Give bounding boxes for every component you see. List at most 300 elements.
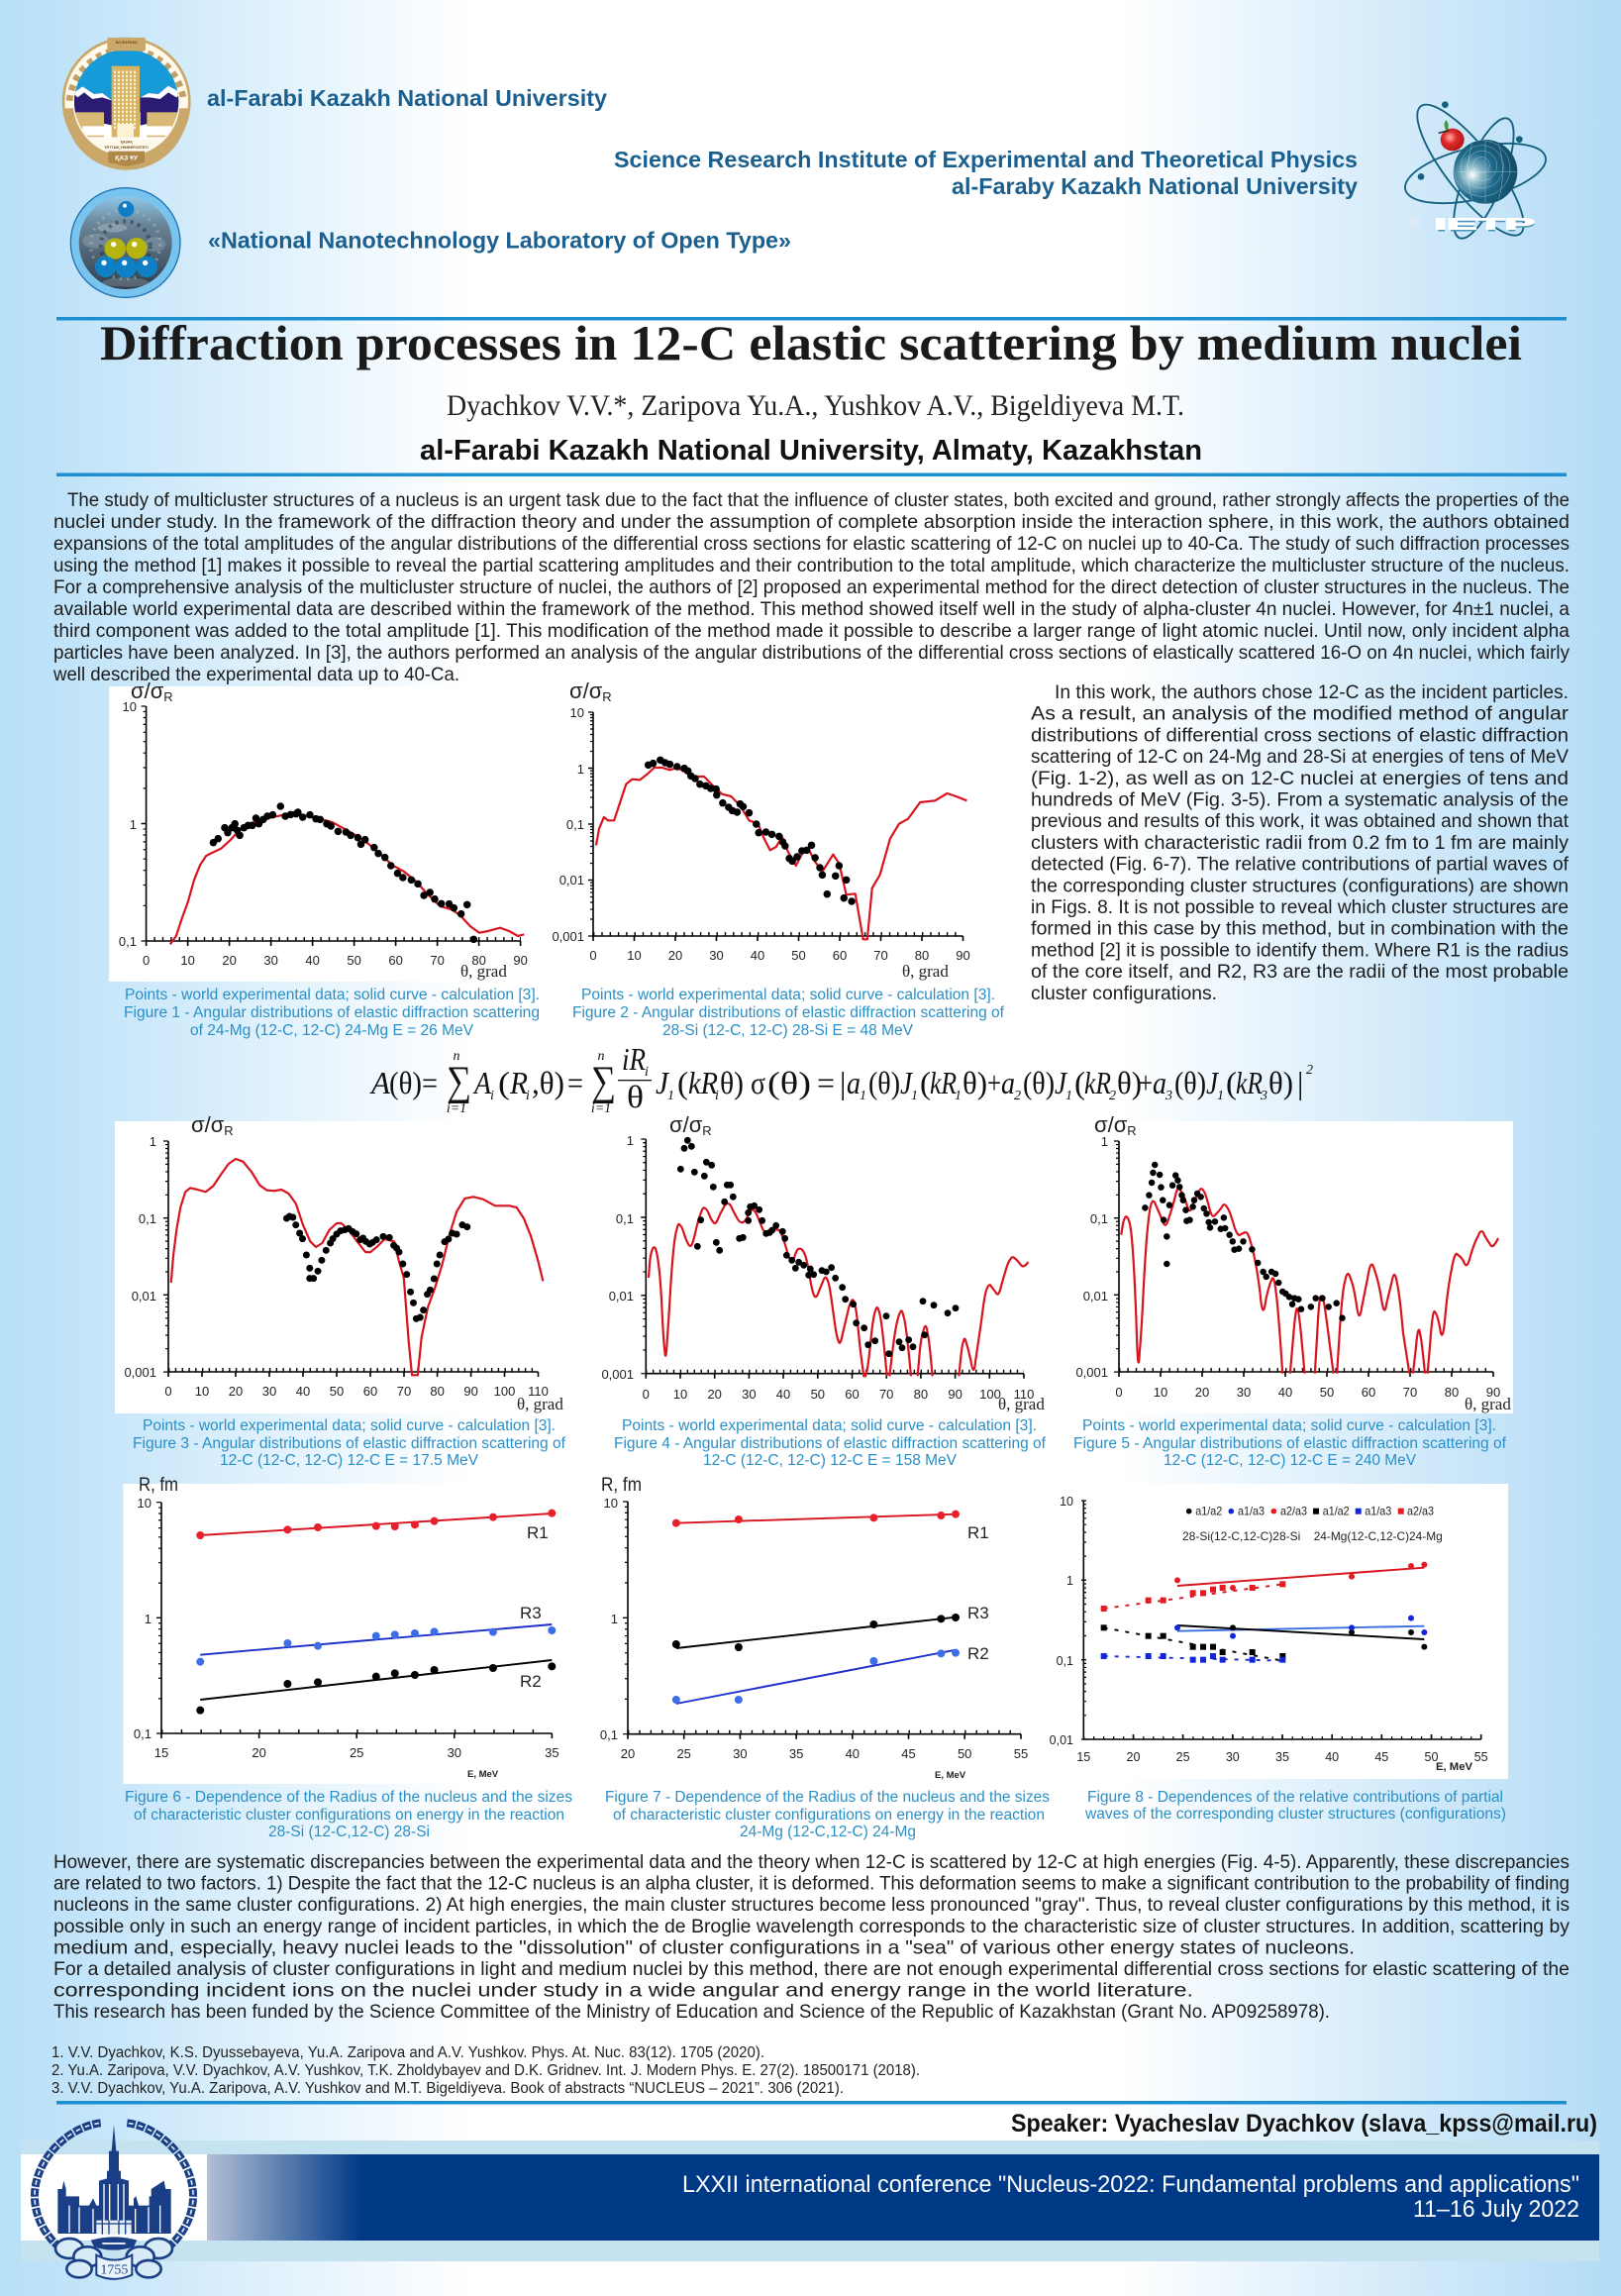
- references: 2. Yu.A. Zaripova, V.V. Dyachkov, A.V. Yushkov, T.K. Zholdybayev and D.K. Gridnev. Int. J. Modern Phys. E. 27(2). 18500171 (2018).: [51, 2062, 920, 2079]
- series: R3: [676, 1618, 956, 1648]
- axes: 40: [1278, 1385, 1292, 1400]
- axes: 35: [545, 1745, 559, 1760]
- series labels: R1: [527, 1523, 549, 1542]
- axes: 60: [833, 948, 847, 963]
- references: [51, 2044, 920, 2097]
- axes: [1050, 1495, 1488, 1764]
- text block: right column: method [2] it is possible to identify them. Where R1 is the radius: [1031, 939, 1569, 961]
- axes: 50: [330, 1384, 344, 1399]
- x axis label: θ, grad: [902, 962, 949, 981]
- text block: introduction: expansions of the total amplitudes of the angular distributions of the differential cross sections for elastic scattering of 12-C on nuclei up to 40-Ca. The study of such diffraction processes: [53, 533, 1570, 555]
- icon: al-Farabi Kazakh National University emblem: ҚАЗ ҰУ: [115, 155, 139, 161]
- caption: Figure 8 - Dependences of the relative contributions of partial: [1087, 1789, 1503, 1806]
- formula: 3: [1260, 1089, 1267, 1103]
- axes: 80: [915, 948, 929, 963]
- y axis label: R: [163, 689, 173, 704]
- text block: right column: hundreds of MeV (Fig. 3-5). From a systematic analysis of the: [1031, 788, 1569, 810]
- y axis label: σ/σ: [131, 678, 163, 703]
- caption: Points - world experimental data; solid curve - calculation [3].: [622, 1417, 1037, 1434]
- caption: Points - world experimental data; solid curve - calculation [3].: [1082, 1417, 1496, 1434]
- formula: iR: [622, 1041, 646, 1077]
- axes: [552, 705, 970, 963]
- series labels: [520, 1523, 549, 1691]
- panel: figure 2: [552, 678, 1005, 1039]
- text block: discussion: are related to two factors. 1) Despite the fact that the 12-C nucleus is an alpha cluster, it is deformed. This deformation seems to make a significant contribution to the probability of finding: [53, 1873, 1570, 1895]
- axes: 60: [363, 1384, 377, 1399]
- icon: al-Farabi Kazakh National University emblem: ӘЛ-ФАРАБИ: [116, 41, 138, 45]
- series labels: R1: [967, 1523, 989, 1542]
- text block: discussion: corresponding incident ions on the nuclei under study in a wide angular and energy range in the world literature.: [53, 1980, 1193, 2002]
- axes: 1: [627, 1133, 634, 1148]
- axes: 0,001: [1075, 1365, 1108, 1380]
- text block: right column: clusters with characteristic radii from 0.2 fm to 1 fm are mainly: [1031, 832, 1569, 854]
- formula: θ): [962, 1065, 987, 1100]
- axes: 15: [1076, 1750, 1090, 1764]
- footer band: [21, 2140, 1599, 2261]
- text block: right column: [1031, 681, 1570, 1004]
- axes: 25: [676, 1746, 691, 1761]
- axes: 90: [1486, 1385, 1500, 1400]
- axes: 0,001: [601, 1367, 634, 1382]
- caption: Figure 2 - Angular distributions of elastic diffraction scattering of: [572, 1004, 1005, 1021]
- x axis label: θ, grad: [998, 1395, 1045, 1413]
- caption: 12-C (12-C, 12-C) 12-C E = 17.5 MeV: [220, 1452, 479, 1469]
- x axis label: θ, grad: [460, 962, 507, 981]
- formula: 1: [667, 1089, 674, 1103]
- y axis label: σ/σ: [669, 1112, 702, 1137]
- legend: a1/a2: [1323, 1504, 1350, 1517]
- title: Diffraction processes in 12-C elastic scattering by medium nuclei: [100, 315, 1522, 370]
- axes: 10: [195, 1384, 209, 1399]
- caption: of 24-Mg (12-C, 12-C) 24-Mg E = 26 MeV: [190, 1022, 474, 1039]
- text block: right column: scattering of 12-C on 24-Mg and 28-Si at energies of tens of MeV: [1031, 746, 1569, 768]
- formula: i: [645, 1065, 649, 1080]
- axes: 10: [570, 705, 584, 720]
- axes: 40: [776, 1387, 790, 1402]
- experimental points: [287, 1216, 467, 1318]
- axes: 50: [1425, 1750, 1438, 1764]
- text block: right column: distributions of differential cross sections of elastic diffraction: [1031, 724, 1569, 746]
- formula: A: [472, 1065, 491, 1100]
- calculation curve: [171, 1159, 543, 1375]
- axes: 100: [979, 1387, 1001, 1402]
- caption: 28-Si (12-C, 12-C) 28-Si E = 48 MeV: [662, 1022, 914, 1039]
- series: R1: [200, 1513, 552, 1535]
- formula: ∑: [591, 1059, 616, 1104]
- calculation curve: [596, 768, 966, 939]
- series labels: [967, 1523, 989, 1663]
- formula: a: [1153, 1065, 1166, 1100]
- axes: 70: [879, 1387, 893, 1402]
- caption: [133, 1417, 566, 1469]
- formula: ∑: [447, 1059, 471, 1104]
- y axis label: R: [1127, 1123, 1137, 1138]
- icon: al-Farabi Kazakh National University emblem: ҰЛТТЫҚ УНИВЕРСИТЕТІ: [105, 146, 149, 150]
- conference name: 11–16 July 2022: [1413, 2196, 1579, 2223]
- formula: ,θ): [532, 1065, 564, 1100]
- axes: 50: [811, 1387, 825, 1402]
- text block: discussion: possible only in such an energy range of incident particles, in which the de Broglie wavelength corresponds to the characteristic size of cluster structures. In addition, scattering by: [53, 1916, 1570, 1937]
- y axis label: σ/σ: [1094, 1112, 1127, 1137]
- icon: IETP atom logo: [1399, 92, 1552, 249]
- formula: kR: [930, 1065, 957, 1100]
- caption: 28-Si (12-C,12-C) 28-Si: [268, 1824, 430, 1840]
- text block: discussion: This research has been funded by the Science Committee of the Ministry of Education and Science of the Republic of Kazakhstan (Grant No. AP09258978).: [53, 2001, 1330, 2023]
- formula: kR: [1236, 1065, 1263, 1100]
- formula: J: [900, 1065, 914, 1100]
- axes: [134, 1496, 559, 1760]
- axes: [600, 1496, 1028, 1761]
- text block: introduction: well described the experimental data up to 40-Ca.: [52, 664, 459, 685]
- axes: 1: [1066, 1574, 1073, 1588]
- icon: Moscow State University emblem: 1755: [100, 2263, 128, 2278]
- formula: (: [498, 1065, 510, 1100]
- axes: 90: [463, 1384, 478, 1399]
- text block: discussion: [53, 1851, 1570, 2023]
- formula: θ): [720, 1065, 744, 1100]
- series: R1: [676, 1514, 956, 1523]
- axes: 55: [1474, 1750, 1488, 1764]
- series: R2: [200, 1660, 552, 1711]
- axes: 40: [296, 1384, 310, 1399]
- axes: 0,1: [119, 934, 137, 949]
- axes: 50: [347, 953, 361, 968]
- formula: (: [920, 1065, 931, 1100]
- references: 1. V.V. Dyachkov, K.S. Dyussebayeva, Yu.A. Zaripova and A.V. Yushkov. Phys. At. Nuc. 83(12). 1705 (2020).: [51, 2044, 764, 2061]
- axes: 10: [627, 948, 642, 963]
- axes: [601, 1133, 1034, 1402]
- axes: 0,1: [134, 1726, 152, 1741]
- caption: Points - world experimental data; solid curve - calculation [3].: [125, 987, 540, 1003]
- formula: θ: [627, 1079, 644, 1114]
- axes: 0: [143, 953, 150, 968]
- axes: 35: [1275, 1750, 1289, 1764]
- heading: institute name: [614, 147, 1358, 199]
- text block: right column: As a result, an analysis of the modified method of angular: [1031, 703, 1570, 725]
- axes: 0,1: [1090, 1211, 1108, 1226]
- header: [62, 38, 1552, 297]
- icon: nanotechnology laboratory emblem: [70, 188, 180, 297]
- text block: introduction: For a comprehensive analysis of the multicluster structure of nuclei, the authors of [2] proposed an experimental method for the direct detection of cluster structures in the nucleus. The: [53, 576, 1570, 598]
- axes: 1: [130, 817, 137, 832]
- formula: (: [1226, 1065, 1237, 1100]
- panel: figure 5: [1064, 1112, 1513, 1469]
- icon: IETP atom logo: IETP: [1435, 219, 1537, 236]
- legend: 28-Si(12-C,12-C)28-Si: [1182, 1529, 1300, 1543]
- panel: figure 7: [600, 1475, 1050, 1840]
- axes: 30: [1226, 1750, 1240, 1764]
- formula: kR: [688, 1065, 718, 1100]
- formula: 2: [1109, 1089, 1116, 1103]
- axes: 10: [1060, 1495, 1073, 1509]
- caption: Figure 5 - Angular distributions of elastic diffraction scattering of: [1073, 1435, 1507, 1452]
- axes: 0,001: [124, 1365, 156, 1380]
- formula: i: [490, 1089, 494, 1103]
- series labels: R2: [520, 1672, 542, 1691]
- heading: institute name: Science Research Institute of Experimental and Theoretical Physics: [614, 147, 1358, 172]
- legend: a2/a3: [1280, 1504, 1307, 1517]
- legend: a1/a3: [1365, 1504, 1392, 1517]
- text block: right column: the corresponding cluster structures (configurations) are shown: [1031, 875, 1569, 896]
- axes: 30: [709, 948, 724, 963]
- formula: (θ): [868, 1065, 900, 1100]
- axes: 40: [846, 1746, 860, 1761]
- caption: of characteristic cluster configurations on energy in the reaction: [134, 1807, 564, 1824]
- series labels: R3: [967, 1604, 989, 1622]
- y axis label: R, fm: [601, 1475, 642, 1496]
- axes: 10: [180, 953, 195, 968]
- experimental points: [649, 760, 852, 901]
- axes: 10: [673, 1387, 687, 1402]
- caption: [124, 987, 540, 1039]
- axes: 10: [1154, 1385, 1167, 1400]
- formula: |: [1297, 1065, 1303, 1100]
- heading: laboratory name: «National Nanotechnology Laboratory of Open Type»: [208, 228, 791, 254]
- axes: 80: [471, 953, 486, 968]
- caption: [614, 1417, 1047, 1469]
- icon: Moscow State University emblem: [35, 2123, 193, 2279]
- legend: a2/a3: [1407, 1504, 1434, 1517]
- formula: a: [847, 1065, 861, 1100]
- panel: figure 3: [115, 1112, 570, 1469]
- caption: of characteristic cluster configurations on energy in the reaction: [613, 1807, 1045, 1824]
- axes: 1: [150, 1134, 156, 1149]
- axes: 30: [262, 1384, 276, 1399]
- text block: introduction: available world experimental data are described within the framework of the method. This method showed itself well in the study of alpha-cluster 4n nuclei. However, for 4n±1 nuclei, a: [53, 598, 1570, 620]
- axes: 0: [589, 948, 597, 963]
- axes: 0: [164, 1384, 172, 1399]
- x axis label: E, MeV: [935, 1770, 966, 1781]
- text block: right column: (Fig. 1-2), as well as on 12-C nuclei at energies of tens and: [1031, 768, 1569, 789]
- axes: 0,01: [609, 1289, 634, 1304]
- heading: institute name: al-Faraby Kazakh National University: [952, 173, 1358, 199]
- formula: |: [840, 1065, 846, 1100]
- axes: 100: [494, 1384, 515, 1399]
- axes: 80: [430, 1384, 445, 1399]
- caption: Points - world experimental data; solid curve - calculation [3].: [143, 1417, 556, 1434]
- formula: (θ): [1174, 1065, 1206, 1100]
- formula: A: [369, 1065, 390, 1100]
- experimental points: [1145, 1165, 1343, 1318]
- caption: [1084, 1789, 1506, 1823]
- caption: Points - world experimental data; solid curve - calculation [3].: [581, 987, 995, 1003]
- axes: 70: [873, 948, 888, 963]
- title block: [56, 315, 1567, 476]
- formula: i: [526, 1089, 530, 1103]
- formula: R: [509, 1065, 528, 1100]
- text block: right column: formed in this case by this method, but in combination with the: [1031, 918, 1569, 940]
- text block: discussion: nucleons in the same cluster configurations. 2) At high energies, the main cluster structures become less pronounced "gray". Thus, to reveal cluster configurations by this method, it is: [53, 1894, 1570, 1916]
- axes: 30: [448, 1745, 461, 1760]
- experimental points: [213, 806, 473, 939]
- axes: 20: [668, 948, 682, 963]
- text block: introduction: particles have been analyzed. In [3], the authors performed an analysis of the angular distributions of the differential cross sections of elastically scattered 16-O on 4n nuclei, which fairly: [53, 642, 1570, 664]
- formula: 1: [955, 1089, 962, 1103]
- calculation curve: [1121, 1189, 1498, 1374]
- axes: 30: [1237, 1385, 1251, 1400]
- axes: 15: [154, 1745, 168, 1760]
- axes: 0,01: [1050, 1733, 1073, 1747]
- axes: 0,1: [139, 1211, 156, 1226]
- axes: 80: [914, 1387, 928, 1402]
- axes: 45: [901, 1746, 916, 1761]
- caption: 12-C (12-C, 12-C) 12-C E = 158 MeV: [703, 1452, 958, 1469]
- axes: 60: [1362, 1385, 1375, 1400]
- heading: university name: al-Farabi Kazakh National University: [207, 85, 607, 111]
- axes: 70: [430, 953, 445, 968]
- axes: [124, 1134, 549, 1399]
- axes: 20: [1127, 1750, 1140, 1764]
- formula: [369, 1041, 1313, 1116]
- caption: 12-C (12-C, 12-C) 12-C E = 240 MeV: [1164, 1452, 1417, 1469]
- formula: θ): [1268, 1065, 1293, 1100]
- axes: 25: [350, 1745, 363, 1760]
- affiliation: al-Farabi Kazakh National University, Almaty, Kazakhstan: [420, 435, 1202, 467]
- icon: al-Farabi Kazakh National University emblem: ҚАЗАҚ: [121, 141, 133, 145]
- axes: 30: [263, 953, 278, 968]
- text block: right column: of the core itself, and R2, R3 are the radii of the most probable: [1031, 961, 1569, 983]
- text block: discussion: medium and, especially, heavy nuclei leads to the "dissolution" of cluster configurations in a "sea" of various other energy states of nucleons.: [53, 1936, 1355, 1958]
- icon: al-Farabi Kazakh National University emblem: [62, 38, 191, 170]
- axes: 0: [1115, 1385, 1123, 1400]
- panel: figure 8: [1050, 1484, 1508, 1823]
- formula: (θ): [1023, 1065, 1055, 1100]
- text block: right column: In this work, the authors chose 12-C as the incident particles.: [1055, 681, 1569, 703]
- authors: Dyachkov V.V.*, Zaripova Yu.A., Yushkov A.V., Bigeldiyeva M.T.: [447, 389, 1184, 422]
- formula: 3: [1165, 1089, 1172, 1103]
- caption: [1073, 1417, 1507, 1469]
- experimental points: [680, 1140, 956, 1354]
- axes: 60: [388, 953, 403, 968]
- axes: 0,1: [616, 1211, 634, 1226]
- conference name: LXXII international conference "Nucleus-2022: Fundamental problems and applications": [682, 2171, 1579, 2198]
- text block: right column: previous and results of this work, it was obtained and shown that: [1031, 810, 1570, 832]
- formula: i: [715, 1089, 719, 1103]
- text block: discussion: For a detailed analysis of cluster configurations in light and medium nuclei by this method, there are not enough experimental differential cross sections for elastic scattering of the: [53, 1958, 1570, 1980]
- axes: 20: [621, 1746, 635, 1761]
- axes: 50: [791, 948, 806, 963]
- caption: Figure 1 - Angular distributions of elastic diffraction scattering: [124, 1004, 540, 1021]
- axes: 30: [733, 1746, 748, 1761]
- axes: 110: [528, 1384, 549, 1399]
- formula: 1: [860, 1089, 866, 1103]
- axes: 20: [252, 1745, 266, 1760]
- axes: 70: [397, 1384, 411, 1399]
- series: R2: [676, 1650, 956, 1704]
- formula: θ): [1117, 1065, 1142, 1100]
- formula: 1: [1217, 1089, 1224, 1103]
- axes: 20: [222, 953, 237, 968]
- axes: 45: [1374, 1750, 1388, 1764]
- formula: i=1: [447, 1101, 466, 1116]
- axes: 20: [707, 1387, 722, 1402]
- caption: Figure 7 - Dependence of the Radius of the nucleus and the sizes: [605, 1789, 1050, 1806]
- caption: waves of the corresponding cluster structures (configurations): [1084, 1806, 1506, 1823]
- axes: 1: [1101, 1134, 1108, 1149]
- axes: 20: [1195, 1385, 1209, 1400]
- x axis label: E, MeV: [1436, 1761, 1473, 1773]
- text block: right column: detected (Fig. 6-7). The relative contributions of partial waves of: [1031, 854, 1570, 876]
- axes: 40: [1325, 1750, 1339, 1764]
- axes: 10: [604, 1496, 618, 1511]
- axes: 0,001: [552, 929, 584, 944]
- x axis label: E, MeV: [467, 1769, 499, 1780]
- formula: +: [987, 1065, 1001, 1100]
- y axis label: R, fm: [139, 1475, 178, 1496]
- calculation curve: [170, 814, 524, 944]
- axes: 1: [611, 1612, 618, 1626]
- formula: +: [1139, 1065, 1153, 1100]
- axes: 35: [789, 1746, 803, 1761]
- caption: [125, 1789, 572, 1840]
- caption: Figure 4 - Angular distributions of elastic diffraction scattering of: [614, 1435, 1047, 1452]
- text block: introduction: using the method [1] makes it possible to reveal the partial scattering amplitudes and their contribution to the total amplitude, which characterize the multicluster structure of the nucleus.: [53, 555, 1570, 576]
- axes: 70: [1403, 1385, 1417, 1400]
- legend: a1/a3: [1238, 1504, 1265, 1517]
- axes: [119, 699, 528, 968]
- formula: 2: [1306, 1063, 1313, 1078]
- text block: introduction: nuclei under study. In the framework of the diffraction theory and under the assumption of complete absorption inside the interaction sphere, in this work, the authors obtained: [53, 511, 1570, 533]
- text block: discussion: However, there are systematic discrepancies between the experimental data and the theory when 12-C is scattered by 12-C at high energies (Fig. 4-5). Apparently, these discrepancies: [53, 1851, 1570, 1873]
- formula: i=1: [591, 1101, 611, 1116]
- x axis label: θ, grad: [517, 1395, 563, 1413]
- series labels: R2: [967, 1644, 989, 1663]
- icon: IETP atom logo: IETP: [1434, 217, 1536, 234]
- axes: 40: [305, 953, 320, 968]
- formula: (θ): [389, 1065, 422, 1100]
- formula: 1: [1065, 1089, 1072, 1103]
- y axis label: R: [224, 1123, 234, 1138]
- panel: figure 6: [123, 1475, 578, 1840]
- formula: (: [1074, 1065, 1085, 1100]
- axes: 90: [513, 953, 528, 968]
- formula: n: [598, 1049, 604, 1064]
- axes: [1075, 1134, 1500, 1400]
- axes: 80: [1445, 1385, 1459, 1400]
- axes: 50: [958, 1746, 971, 1761]
- text block: introduction: The study of multicluster structures of a nucleus is an urgent task due to the fact that the influence of cluster states, both excited and ground, rather strongly affects the properties of the: [67, 489, 1570, 511]
- axes: 0,1: [566, 817, 584, 832]
- formula: J: [1206, 1065, 1220, 1100]
- text block: right column: in Figs. 8. It is not possible to reveal which cluster structures are: [1031, 896, 1569, 918]
- axes: 10: [138, 1496, 152, 1511]
- series: R3: [200, 1624, 552, 1662]
- y axis label: σ/σ: [569, 678, 602, 703]
- formula: (θ): [767, 1065, 811, 1100]
- axes: 0: [643, 1387, 650, 1402]
- axes: 20: [229, 1384, 243, 1399]
- text block: introduction: third component was added to the total amplitude [1]. This modification of the method made it possible to describe a larger range of light atomic nuclei. Until now, only incident alpha: [53, 620, 1570, 642]
- legend: 24-Mg(12-C,12-C)24-Mg: [1314, 1529, 1443, 1543]
- formula: n: [454, 1049, 459, 1064]
- formula: J: [656, 1065, 670, 1100]
- axes: 0,01: [1083, 1289, 1108, 1304]
- caption: Figure 3 - Angular distributions of elastic diffraction scattering of: [133, 1435, 566, 1452]
- y axis label: R: [702, 1123, 712, 1138]
- formula: =: [817, 1065, 835, 1100]
- caption: Figure 6 - Dependence of the Radius of the nucleus and the sizes: [125, 1789, 572, 1806]
- axes: 110: [1014, 1387, 1034, 1402]
- text block: right column: cluster configurations.: [1031, 983, 1217, 1004]
- caption: [572, 987, 1005, 1039]
- legend: [1182, 1504, 1443, 1543]
- x axis label: θ, grad: [1465, 1395, 1511, 1413]
- text block: introduction: [52, 489, 1570, 685]
- axes: 0,1: [1057, 1654, 1073, 1668]
- formula: a: [1001, 1065, 1015, 1100]
- y axis label: R: [602, 689, 612, 704]
- trend lines and data points: [1101, 1565, 1424, 1663]
